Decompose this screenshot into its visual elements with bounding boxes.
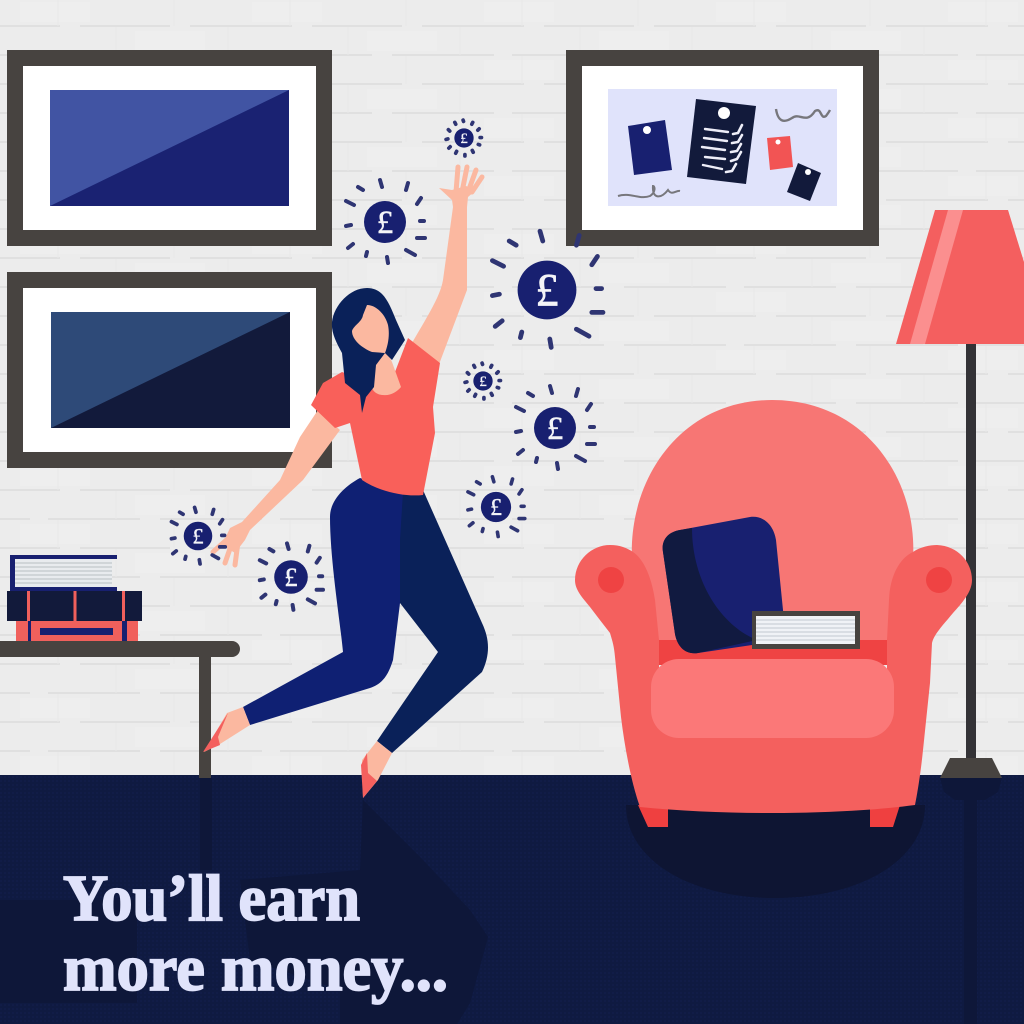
- pound coin 3: [492, 231, 603, 347]
- book on chair: [752, 611, 860, 649]
- pound coin 2: [346, 180, 425, 263]
- framed picture: pinned notes: [566, 50, 879, 246]
- pound coin 1: £: [460, 130, 468, 147]
- right foot and shoe: [361, 741, 392, 798]
- framed picture: blue diagonal: [7, 50, 332, 246]
- armchair: [575, 400, 972, 827]
- pound coin 4: £: [479, 373, 487, 390]
- back leg: [377, 490, 488, 753]
- hair: [332, 288, 405, 413]
- neck: [360, 345, 401, 395]
- pound coin 6: £: [490, 495, 502, 521]
- title: You’ll earn: [63, 862, 360, 935]
- brick wall background: [0, 0, 1024, 776]
- pound coin 8: £: [284, 562, 298, 592]
- pound coin 5: £: [547, 411, 563, 447]
- title: [63, 862, 448, 1005]
- pound coin 5: [516, 386, 595, 469]
- front leg: [243, 478, 403, 725]
- left foot and shoe: [203, 707, 250, 752]
- lowered arm: [213, 410, 340, 565]
- pound coin 1: [446, 120, 481, 156]
- pound coin 4: [465, 363, 500, 399]
- pound coin 6: [468, 477, 525, 537]
- raised arm: [405, 167, 482, 375]
- carpet floor: [0, 775, 1024, 1024]
- floor lamp: [896, 210, 1024, 778]
- pound coin 3: £: [535, 264, 559, 315]
- framed picture: dark diagonal: [7, 272, 332, 468]
- cushion: [663, 517, 786, 653]
- pound coin 7: [171, 507, 225, 564]
- side table with books: [0, 555, 240, 778]
- stack of books: [7, 555, 142, 641]
- face: [352, 305, 389, 353]
- pound coin 8: [260, 543, 323, 610]
- shirt: [311, 338, 440, 495]
- pound coin 2: £: [377, 205, 393, 241]
- woman jumping: [203, 167, 488, 798]
- pound coin 7: £: [192, 523, 204, 548]
- title: more money...: [63, 932, 448, 1005]
